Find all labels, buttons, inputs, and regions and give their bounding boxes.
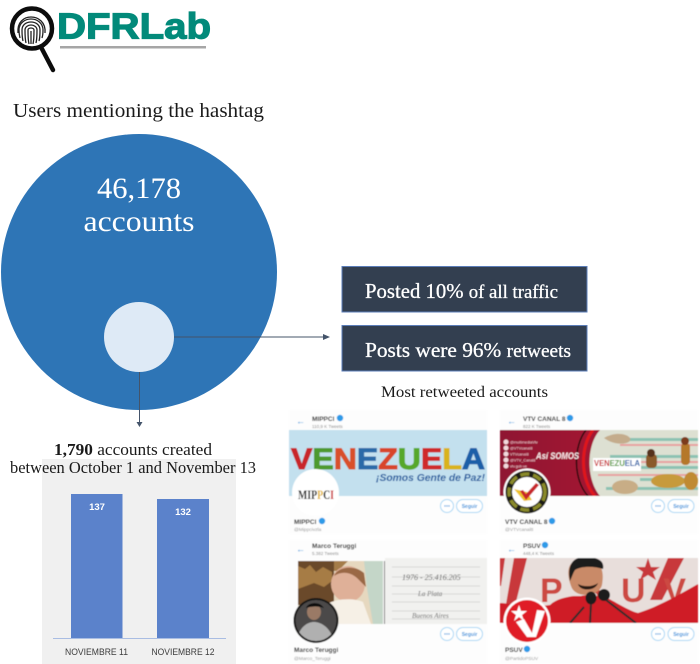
- chart heading: accounts created: 1,790 accounts created: [54, 440, 213, 459]
- profile name: MIPPCI: [294, 519, 317, 526]
- back arrow: ←: [296, 416, 305, 426]
- handle: @PartidoPSUV: [505, 656, 539, 662]
- scenic right side: [576, 430, 698, 496]
- banner slogan: ¡Somos Gente de Paz!: [376, 472, 485, 484]
- tweet count: 5.382 Tweets: [312, 551, 339, 556]
- follow button: [668, 628, 694, 640]
- banner social handles: vtv.gob.ve: [510, 464, 527, 468]
- handle: @Marco_Teruggi: [294, 656, 331, 662]
- big circle: all accounts: [1, 134, 277, 410]
- value: 137: 137: [89, 502, 105, 513]
- back arrow: ←: [296, 544, 305, 554]
- more button: [440, 628, 454, 640]
- icon: magnifying glass with fingerprint: [12, 8, 53, 70]
- twitter card: PSUV: [500, 540, 698, 664]
- twitter card: MIPPCI: [289, 410, 487, 534]
- profile name: Marco Teruggi: [294, 647, 338, 654]
- banner: baby photo: [298, 561, 383, 624]
- banner slogan: Así SOMOS: [535, 451, 580, 462]
- verified badge: [319, 518, 325, 524]
- chart heading second line: between October 1 and November 13: [10, 458, 256, 477]
- account name header: VTV CANAL 8: [523, 416, 566, 423]
- mini Venezuela label: VENEZUELA: [594, 459, 640, 468]
- profile name: PSUV: [505, 647, 523, 654]
- avatar: [504, 468, 550, 516]
- twitter card: Marco Teruggi: [289, 540, 487, 664]
- verified badge: [337, 415, 343, 421]
- bar: Noviembre 12: [157, 499, 209, 638]
- title: users mentioning the hashtag: Users mentioning the hashtag: [13, 100, 264, 122]
- follow button: Seguir: [673, 504, 689, 510]
- tweet count: 448,4 K Tweets: [523, 551, 555, 556]
- stat box: posted 10%: [342, 266, 587, 312]
- banner: [289, 430, 487, 496]
- logo underline: [60, 46, 206, 48]
- value: 132: 132: [175, 507, 191, 518]
- account name header: PSUV: [523, 543, 541, 550]
- verified badge: [524, 646, 530, 652]
- stat box text: Posted 10% of all traffic: [365, 279, 558, 303]
- small circle: subset of accounts: [104, 302, 174, 372]
- tweet count: 110,9 K Tweets: [312, 424, 343, 429]
- banner lettering: VENEZUELA: [291, 443, 485, 476]
- banner: speaker photo: [500, 557, 698, 623]
- arrow: down to bar chart: [136, 372, 142, 427]
- logo wordmark: DFRLab: [57, 6, 211, 46]
- avatar: [504, 598, 550, 644]
- banner: birth document: La Plata: [417, 590, 443, 598]
- twitter card: VTV Canal 8: [500, 410, 698, 534]
- stat box text: Posts were 96% retweets: [365, 338, 571, 362]
- more button: [652, 500, 664, 512]
- follow button: Seguir: [673, 632, 689, 638]
- tweet count: 822 K Tweets: [523, 424, 551, 429]
- follow button: Seguir: [462, 632, 477, 638]
- more button: [440, 500, 454, 512]
- back arrow: ←: [507, 544, 516, 554]
- stat box: 96% retweets: [342, 326, 587, 371]
- banner social handles: VTVcanal8: [510, 452, 529, 456]
- chart heading: accounts created: [10, 440, 256, 477]
- banner social handles: @multimediaVtv: [510, 440, 538, 444]
- account name header: Marco Teruggi: [312, 543, 356, 550]
- back arrow: ←: [507, 416, 516, 426]
- banner social handles: @VTV_Canal8: [510, 458, 535, 462]
- handle: @VTVcanal8: [505, 527, 534, 533]
- verified badge: [542, 542, 548, 548]
- verified badge: [549, 518, 555, 524]
- avatar: [294, 598, 338, 643]
- handle: @Mippcivzla: [294, 527, 322, 533]
- account name header: MIPPCI: [312, 416, 335, 423]
- arrow: to the stat boxes: [174, 334, 330, 340]
- big circle number: 46,178: [97, 172, 181, 205]
- banner: [500, 430, 698, 496]
- follow button: [668, 500, 694, 512]
- banner: birth document: 1976 - 25.416.205: [402, 573, 461, 582]
- chart axis: [53, 638, 226, 639]
- logo: DFRLab: [12, 6, 211, 70]
- more button: [652, 628, 664, 640]
- banner: speaker photo: PSUV: [540, 572, 686, 610]
- verified badge: [567, 415, 573, 421]
- banner social handles: [504, 440, 538, 468]
- bar: Noviembre 11: [71, 494, 122, 638]
- mini Venezuela label: [593, 458, 641, 471]
- avatar: [292, 469, 339, 516]
- panel: bar chart: [42, 459, 236, 664]
- follow button: [456, 500, 482, 512]
- heading: most retweeted accounts: Most retweeted accounts: [381, 384, 548, 401]
- avatar text: MIPPCI: [298, 488, 334, 502]
- follow button: Seguir: [462, 504, 477, 510]
- banner: birth document: [384, 558, 487, 624]
- big circle label: accounts: [84, 205, 194, 238]
- banner: birth document: Buenos Aires: [412, 612, 449, 620]
- follow button: [456, 628, 482, 640]
- banner social handles: @VTVcanal8: [510, 446, 532, 450]
- profile name: VTV CANAL 8: [505, 519, 548, 526]
- axis label: Noviembre 11: NOVIEMBRE 11: [65, 647, 128, 657]
- axis label: Noviembre 12: NOVIEMBRE 12: [152, 647, 215, 657]
